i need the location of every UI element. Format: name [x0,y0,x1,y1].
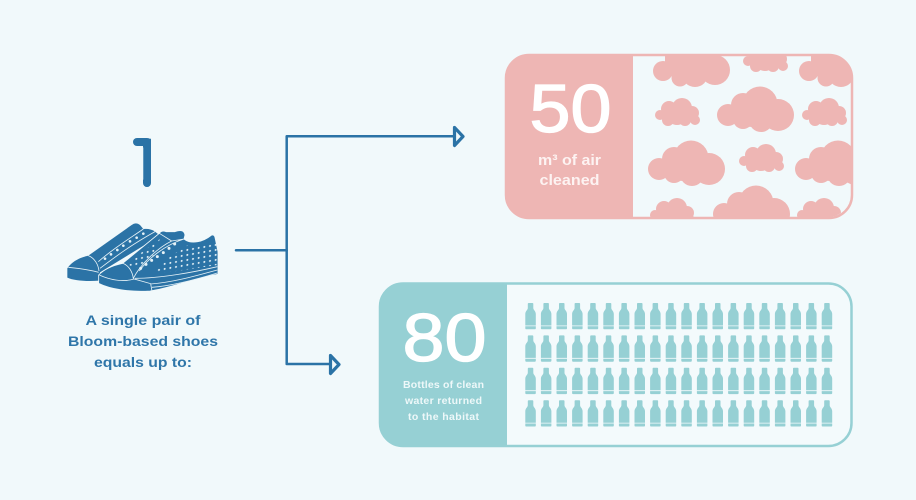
back shoe [67,223,160,281]
panel side: 50 [505,54,633,219]
bottle grid: 80 bottles [525,303,832,426]
label: air cleaned: m³ of air [538,152,601,169]
front shoe [99,231,218,291]
text: pair equals: Bloom-based shoes [68,333,218,349]
arrow: branching connector [236,128,463,374]
text: pair equals: A single pair of [86,312,201,328]
label: bottles of clean water: Bottles of clean [403,379,484,391]
number: 80: 80 [402,300,486,376]
clouds [648,56,851,217]
number: 1: 1 [130,123,163,202]
panel: water bottles [379,282,852,447]
number: 50: 50 [530,71,612,147]
panel: air cleaned [504,54,854,220]
panel side: 80 [379,282,507,447]
label: bottles of clean water: to the habitat [408,411,480,423]
icon: pair of shoes [67,223,218,291]
number: 1 [133,138,151,187]
label: bottles of clean water: water returned [404,395,482,407]
label: air cleaned [538,152,601,189]
text: pair equals: equals up to: [94,354,192,370]
label: bottles of clean water [403,379,484,423]
text: pair equals [68,312,218,370]
label: air cleaned: cleaned [540,172,600,189]
